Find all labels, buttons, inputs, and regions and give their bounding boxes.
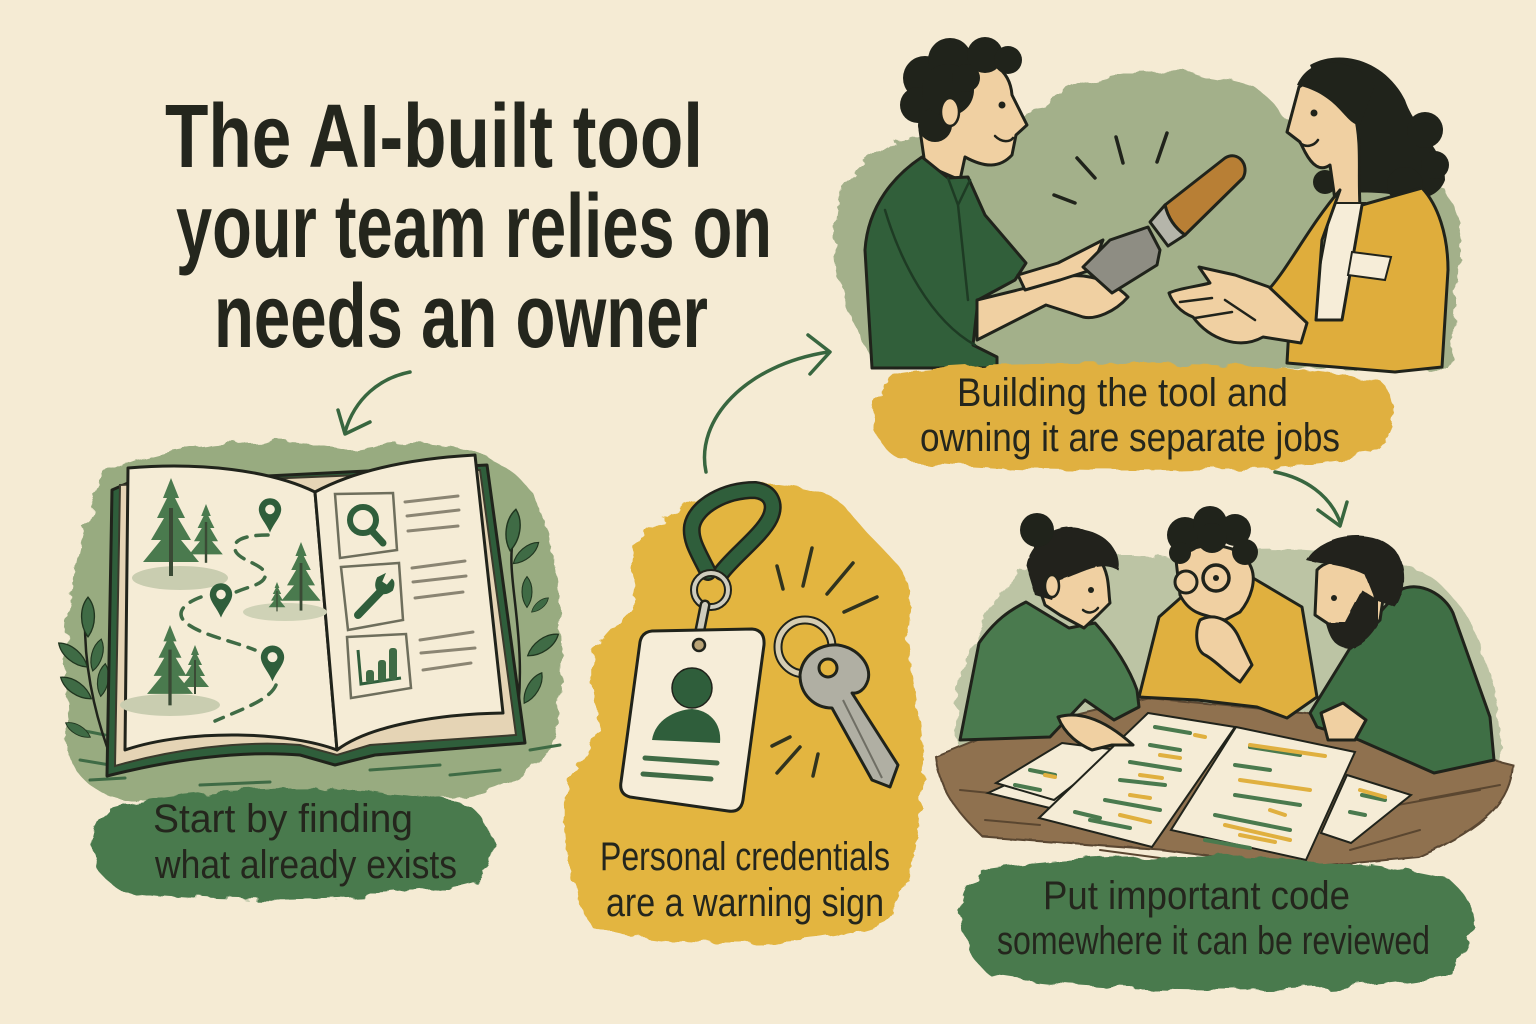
title: your team relies on: [176, 177, 772, 277]
name badge: [1348, 252, 1391, 280]
icon: wrench box: [341, 563, 403, 630]
sage backdrop: [834, 71, 1462, 370]
forearm and hands: [977, 276, 1128, 340]
caption: put important code: [962, 857, 1472, 990]
person: man with glasses: [1139, 506, 1317, 718]
panel: code review: [936, 506, 1513, 868]
sage backdrop: [65, 442, 562, 800]
index text lines: [405, 496, 475, 670]
caption: start by finding: what already exists: [154, 843, 457, 887]
sparkle lines: [772, 548, 877, 776]
cover: [107, 465, 525, 776]
code lines green: [1015, 727, 1385, 848]
left branch leaves: [55, 597, 112, 760]
person: woman pointing: [960, 513, 1139, 740]
map trees: [120, 478, 327, 716]
chisel: [1083, 156, 1245, 293]
panel: credentials: [564, 484, 923, 943]
icon: magnifier box: [335, 493, 397, 558]
arrow: title to book: [338, 372, 410, 434]
ground hatching: [80, 730, 560, 785]
caption: building vs owning: [874, 363, 1393, 471]
person: new owner: [1169, 58, 1449, 372]
hair back: [1310, 58, 1449, 203]
person: builder: [865, 37, 1128, 368]
badge photo: [672, 668, 712, 708]
face and neck: [920, 59, 1027, 180]
curly hair: [900, 37, 1022, 142]
lanyard loop: [692, 490, 773, 572]
right page: [315, 455, 503, 750]
white tee: [1310, 203, 1365, 330]
arrow: handover to review: [1275, 472, 1347, 526]
eye and smile: [998, 102, 1006, 108]
ear: [941, 98, 959, 126]
sparkle lines: [1054, 133, 1167, 203]
id badge: [621, 629, 764, 811]
face: [1287, 82, 1360, 207]
panel: open book: [55, 442, 562, 800]
icon: bar chart box: [347, 634, 411, 698]
mustard jacket: [1270, 188, 1448, 372]
key: [778, 620, 898, 787]
left page: [125, 466, 337, 750]
caption: start by finding: [92, 789, 492, 899]
code lines mustard: [1045, 735, 1385, 842]
eye and smile: [1310, 110, 1318, 116]
sage backdrop: [956, 549, 1500, 760]
dashed map trail: [181, 535, 276, 721]
table grain: [960, 785, 1500, 858]
metal clip: [694, 573, 728, 640]
title: [165, 87, 772, 367]
title: The AI-built tool: [165, 87, 703, 187]
hair fringe: [1297, 62, 1375, 125]
woman's pointing hand: [1058, 715, 1133, 750]
panel: handover: [834, 37, 1462, 372]
wooden table: [936, 698, 1513, 868]
open hands: [1169, 267, 1307, 343]
map pins: [210, 498, 284, 681]
right branch leaves: [503, 508, 562, 735]
arrow: keys to handover: [704, 335, 830, 472]
panel: credentials: are a warning sign: [606, 881, 884, 925]
page block: [115, 470, 516, 766]
caption: building vs owning: owning it are separate jobs: [920, 416, 1340, 460]
panel: credentials: Personal credentials: [600, 835, 890, 879]
green shirt: [865, 157, 1026, 368]
person: bearded man in hoodie: [1306, 536, 1494, 773]
code sheets: [988, 713, 1411, 860]
caption: building vs owning: Building the tool and: [957, 371, 1288, 415]
caption: start by finding: Start by finding: [153, 797, 413, 841]
title: needs an owner: [214, 267, 708, 367]
badge lines: [643, 758, 717, 779]
caption: put important code: Put important code: [1043, 874, 1350, 918]
caption: put important code: somewhere it can be reviewed: [997, 919, 1430, 963]
mustard backdrop: [564, 484, 923, 943]
